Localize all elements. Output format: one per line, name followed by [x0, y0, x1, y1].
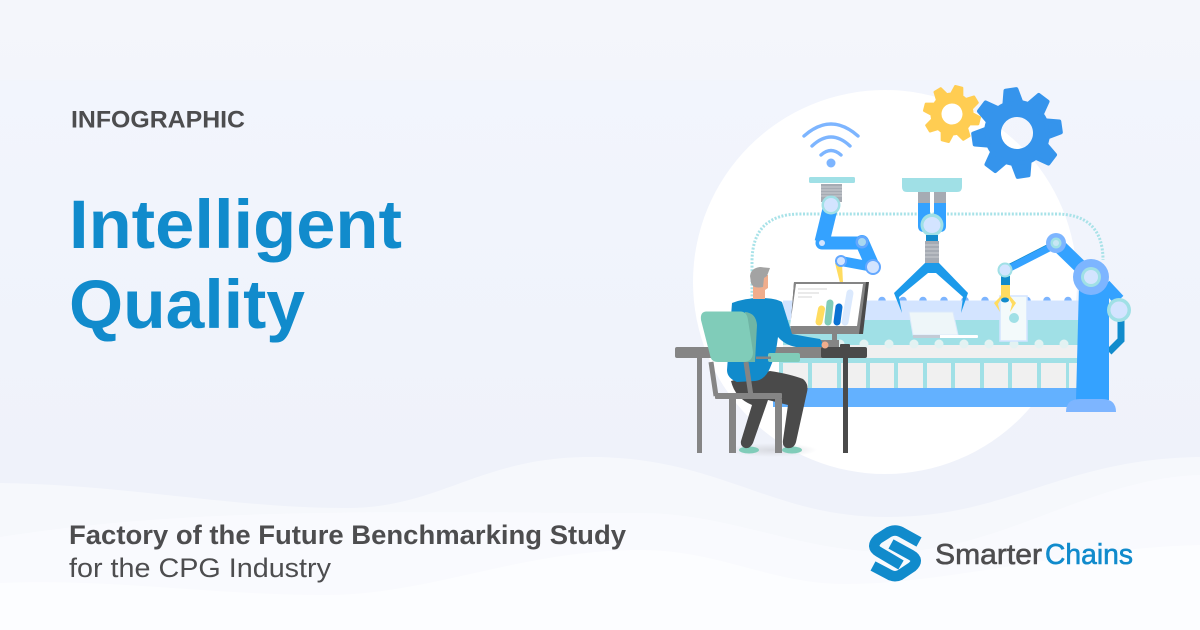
icon: yellow gear: [918, 80, 986, 148]
trousers: [731, 371, 808, 448]
logo wordmark: [935, 539, 1133, 571]
icon: blue gear: [968, 84, 1066, 182]
title: [69, 186, 402, 343]
robot arm: middle claw: [894, 178, 968, 313]
desk and monitor: [675, 282, 869, 453]
eyebrow: INFOGRAPHIC: INFOGRAPHIC: [71, 106, 245, 134]
floor shadow: [727, 443, 817, 457]
logo wordmark: Chains: [1045, 539, 1133, 571]
icon: wifi: [804, 124, 858, 168]
robot arm: right with gripper: [994, 233, 1131, 412]
logo: SmarterChains: [873, 530, 1133, 576]
office chair: [701, 312, 800, 453]
head and hair: [750, 267, 770, 299]
torso and arm: [727, 298, 822, 382]
dotted connection line: [752, 214, 1103, 300]
logo wordmark: Smarter: [935, 539, 1042, 571]
tablet on belt: [1000, 296, 1027, 341]
title: Quality: [69, 266, 305, 343]
robot arm: left: [809, 177, 881, 283]
logo mark: [873, 530, 919, 576]
laptop on belt: [909, 312, 978, 338]
subtitle: for the CPG Industry: [69, 553, 332, 583]
person at desk: [727, 267, 828, 454]
subtitle: [69, 520, 626, 583]
subtitle: Factory of the Future Benchmarking Study: [69, 520, 626, 550]
illustration: smart factory: [675, 80, 1131, 457]
title: Intelligent: [69, 186, 402, 263]
conveyor belt: [773, 297, 1080, 407]
shoes: [739, 446, 802, 454]
wave layers: [0, 457, 1200, 630]
white circle behind illustration: [693, 90, 1077, 474]
